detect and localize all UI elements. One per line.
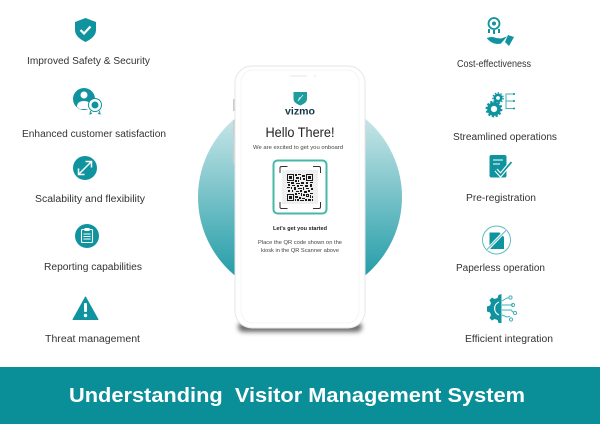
icon: person with award badge bbox=[73, 88, 102, 114]
item: Scalability and flexibility: Scalability and flexibility bbox=[35, 194, 145, 205]
QR instructions: kiosk in the QR Scanner above bbox=[261, 248, 339, 254]
item: Enhanced customer satisfaction bbox=[22, 88, 166, 140]
icon: half gear circuit bbox=[487, 294, 517, 323]
footer banner: Understanding Visitor Management System bbox=[69, 385, 525, 407]
background circle bbox=[198, 95, 402, 299]
item: Scalability and flexibility bbox=[35, 156, 145, 205]
item: Threat management: Threat management bbox=[45, 334, 140, 345]
icon: expand arrows bbox=[73, 156, 97, 180]
item: Enhanced customer satisfaction: Enhanced customer satisfaction bbox=[22, 129, 166, 140]
item: Paperless operation bbox=[456, 226, 545, 274]
item: Improved Safety & Security bbox=[27, 18, 150, 67]
greeting subtext: We are excited to get you onboard bbox=[253, 145, 343, 151]
vizmo logo bbox=[285, 92, 315, 118]
QR code scanner bbox=[274, 160, 326, 214]
item: Efficient integration bbox=[465, 294, 553, 345]
icon: crossed-out paper bbox=[482, 226, 510, 254]
item: Reporting capabilities bbox=[44, 224, 142, 273]
item: Improved Safety & Security: Improved Safety & Security bbox=[27, 56, 150, 67]
item: Efficient integration: Efficient integration bbox=[465, 334, 553, 345]
item: Threat management bbox=[45, 297, 140, 345]
icon: warning triangle bbox=[73, 297, 98, 320]
item: Reporting capabilities: Reporting capabilities bbox=[44, 262, 142, 273]
greeting heading: Hello There! bbox=[266, 124, 334, 140]
item: Paperless operation: Paperless operation bbox=[456, 263, 545, 274]
icon: clipboard bbox=[75, 224, 99, 248]
item: Cost-effectiveness: Cost-effectiveness bbox=[457, 59, 531, 70]
icon: shield bbox=[75, 18, 96, 42]
QR instructions: Place the QR code shown on the bbox=[258, 240, 342, 246]
item: Pre-registration bbox=[466, 155, 536, 204]
item: Cost-effectiveness bbox=[457, 18, 531, 70]
phone mockup bbox=[233, 66, 366, 332]
item: Streamlined operations: Streamlined operations bbox=[453, 132, 557, 143]
item: Streamlined operations bbox=[453, 93, 557, 143]
icon: gears and flow bbox=[486, 93, 515, 116]
call to action heading: Let's get you started bbox=[273, 226, 327, 232]
item: Pre-registration: Pre-registration bbox=[466, 193, 536, 204]
QR instructions bbox=[258, 240, 342, 254]
vizmo logo: vizmo bbox=[285, 106, 315, 118]
icon: coin over hand bbox=[487, 18, 514, 46]
footer banner bbox=[0, 367, 600, 424]
icon: checklist document bbox=[490, 155, 512, 178]
